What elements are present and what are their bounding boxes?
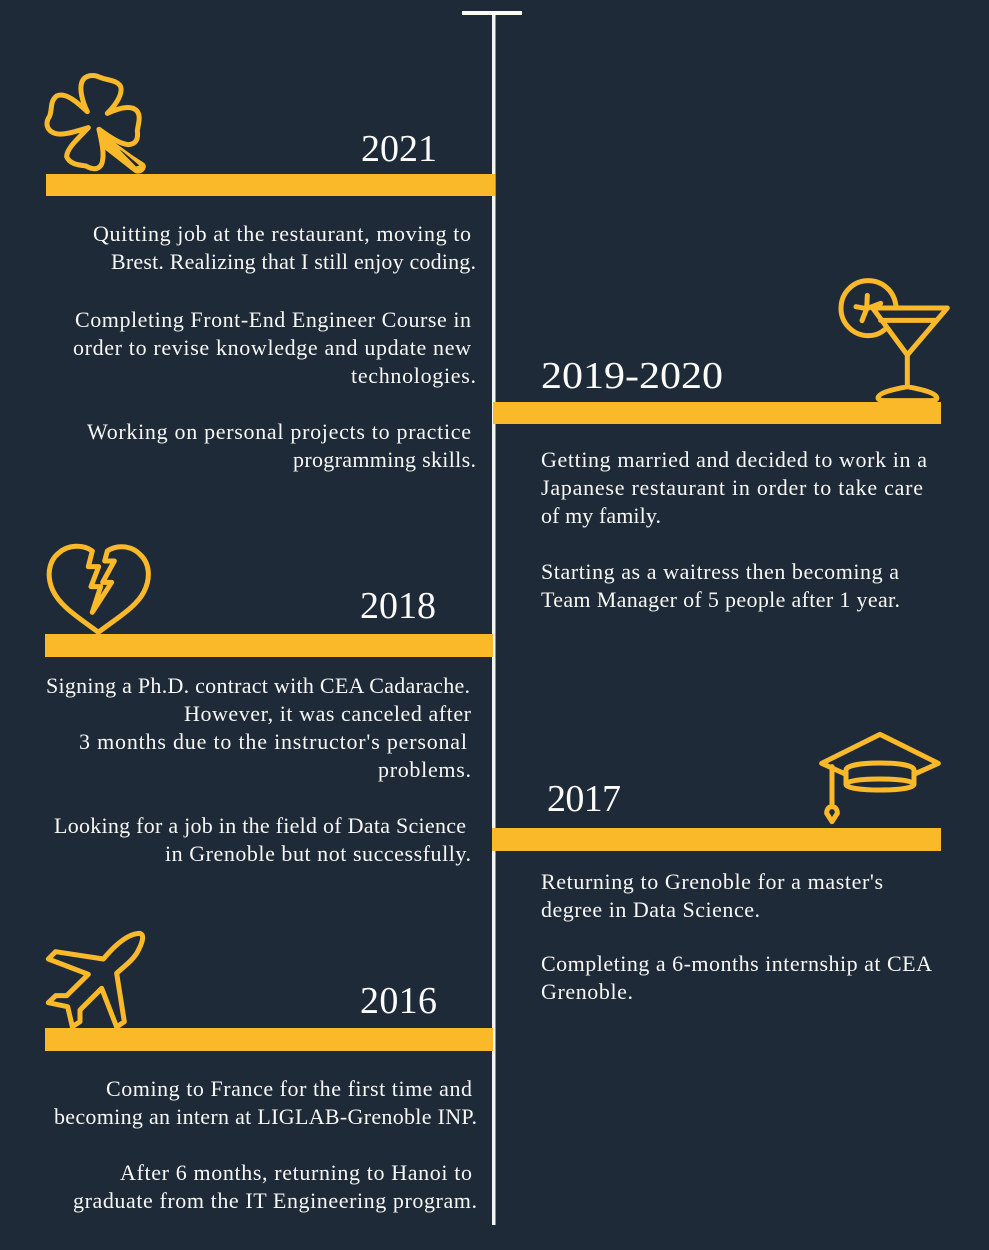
text block: 2017: Returning to Grenoble for a master's [541,869,883,894]
text block: 2018: Looking for a job in the field of Data Science [54,813,466,838]
bar: 2016 [45,1028,493,1051]
year heading: 2017: 2017 [547,778,621,820]
panel: 2021 [46,75,495,472]
text block: 2019-2020: Starting as a waitress then becoming a [541,559,899,584]
text block: 2018: 3 months due to the instructor's personal [79,729,467,754]
text block: 2021: programming skills. [293,447,476,472]
panel: 2017 [492,734,941,1004]
icon: graduation cap [822,734,938,822]
text block: 2016: Coming to France for the first time and [106,1076,472,1101]
text block: 2018 [46,673,472,866]
bar: 2017 [492,828,941,851]
timeline axis [462,11,522,1225]
text block: 2016: After 6 months, returning to Hanoi to [120,1160,472,1185]
bar: 2018 [45,634,493,657]
icon: airplane [48,933,143,1027]
text block: 2017: Grenoble. [541,979,633,1004]
text block: 2017: Completing a 6-months internship at CEA [541,951,932,976]
text block: 2021: Brest. Realizing that I still enjoy coding. [111,249,476,274]
text block: 2019-2020: of my family. [541,503,661,528]
text block: 2016: graduate from the IT Engineering program. [73,1188,477,1213]
year heading: 2018: 2018 [360,585,436,627]
bar: 2021 [46,174,495,196]
text block: 2018: problems. [378,757,471,782]
text block: 2017: degree in Data Science. [541,897,760,922]
bar: 2019-2020 [493,402,941,424]
text block: 2017 [541,869,932,1004]
text block: 2021: order to revise knowledge and update new [73,335,471,360]
icon: broken heart [49,546,148,632]
text block: 2019-2020 [541,447,927,612]
text block: 2019-2020: Team Manager of 5 people after 1 year. [541,587,900,612]
icon: four-leaf clover [47,75,143,171]
text block: 2016: becoming an intern at LIGLAB-Grenoble INP. [54,1104,477,1129]
text block: 2019-2020: Japanese restaurant in order to take care [541,475,923,500]
text block: 2018: in Grenoble but not successfully. [165,841,471,866]
panel: 2019-2020 [493,281,947,612]
year heading: 2019-2020: 2019-2020 [541,355,723,397]
text block: 2018: Signing a Ph.D. contract with CEA Cadarache. [46,673,470,698]
year heading: 2021: 2021 [361,128,437,170]
text block: 2021: technologies. [351,363,476,388]
year heading: 2016: 2016 [360,980,437,1022]
text block: 2018: However, it was canceled after [184,701,472,726]
panel: 2018 [45,546,493,866]
text block: 2016 [54,1076,477,1213]
text block: 2019-2020: Getting married and decided to work in a [541,447,927,472]
text block: 2021: Working on personal projects to practice [87,419,471,444]
text block: 2021: Quitting job at the restaurant, moving to [93,221,471,246]
icon: cocktail glass [841,281,947,401]
text block: 2021: Completing Front-End Engineer Course in [75,307,471,332]
text block: 2021 [73,221,476,472]
panel: 2016 [45,933,493,1213]
